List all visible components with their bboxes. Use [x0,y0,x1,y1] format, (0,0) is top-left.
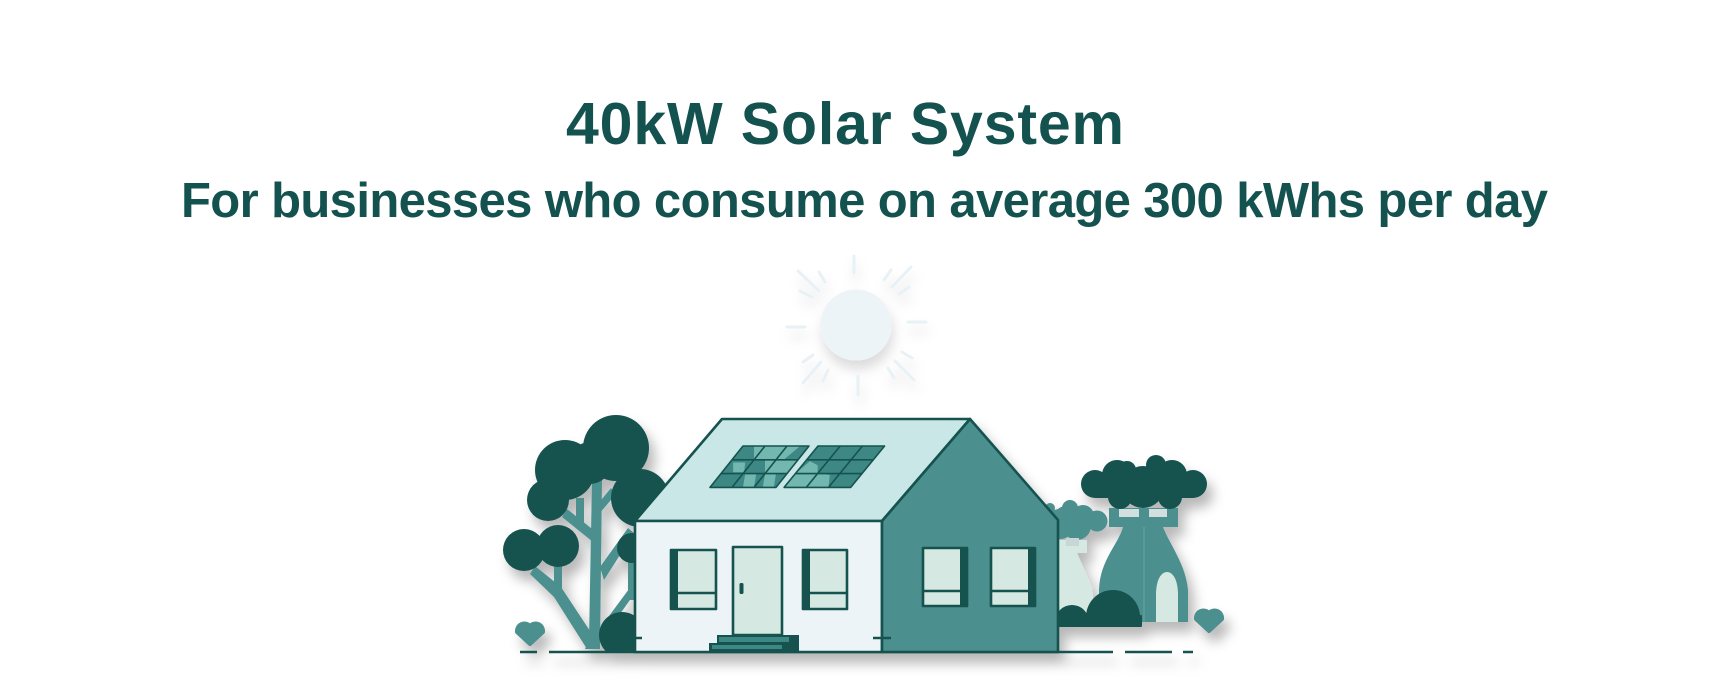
house [635,419,1058,652]
tree: left [503,415,669,658]
title: 40kW Solar System [566,91,1124,157]
steps [709,635,799,651]
icon: heart right [1196,611,1222,631]
illustration: house and garden [503,415,1222,658]
icon: heart left [517,624,543,644]
window front left [670,549,716,610]
bushes right [1055,590,1142,644]
icon: sun [787,256,926,395]
tree: baobab [1081,455,1207,622]
window front right [802,549,847,610]
subtitle: For businesses who consume on average 300 kWhs per day [181,174,1548,228]
ground line [520,651,1193,653]
roof [635,419,970,521]
door [733,547,782,635]
window side right [991,547,1036,607]
tree: middle right [1045,500,1108,625]
solar panel left [710,446,809,487]
side wall [882,419,1058,652]
front wall [635,521,882,652]
solar panel right [784,446,885,487]
window side left [923,547,968,607]
